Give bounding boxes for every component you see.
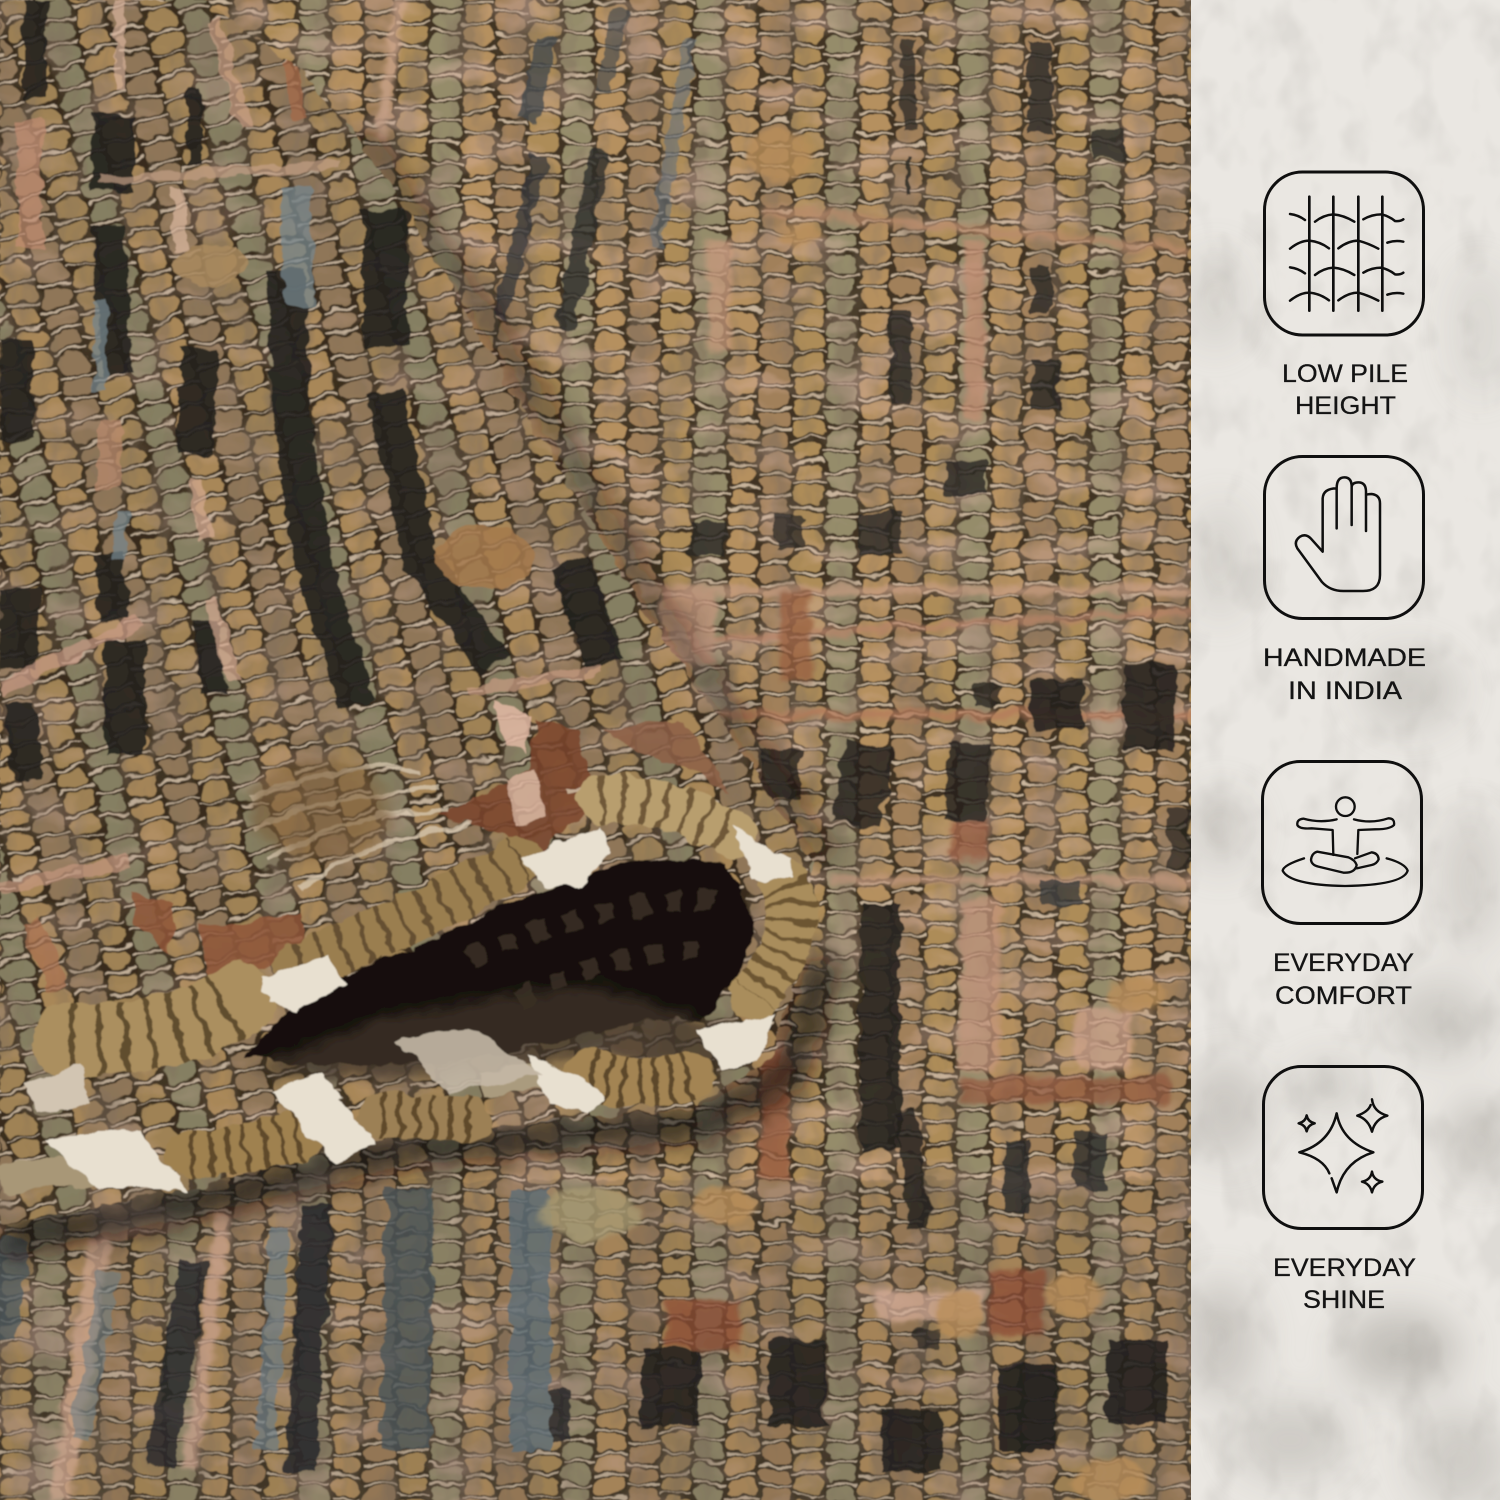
- label: everyday shine: [1273, 1254, 1416, 1314]
- feature: everyday comfort: [1262, 762, 1422, 1010]
- label: everyday shine: EVERYDAY: [1273, 1254, 1416, 1282]
- roll: brown end band: [130, 700, 730, 975]
- rug end: cream cotton tufts: [25, 825, 790, 1190]
- roll: dark stripes: [15, 0, 605, 780]
- label: low pile height: LOW PILE: [1282, 360, 1408, 388]
- roll: slate stripes: [100, 190, 300, 560]
- label: handmade in india: HANDMADE: [1263, 644, 1426, 672]
- label: everyday shine: SHINE: [1303, 1286, 1385, 1314]
- feature: low pile height: [1264, 172, 1424, 420]
- side panel: [1180, 0, 1500, 1500]
- label: low pile height: [1282, 360, 1408, 420]
- flat rug: pink and brown woven blocks: [60, 0, 1200, 1500]
- roll: shaded yarn mound: [435, 526, 535, 590]
- icon: open hand: [1264, 456, 1424, 618]
- feature: everyday shine: [1264, 1066, 1422, 1314]
- roll: pink and brown bands: [0, 0, 600, 990]
- roll hollow: inner back side: [250, 985, 770, 1080]
- label: low pile height: HEIGHT: [1295, 392, 1396, 420]
- panel: frosted background: [1191, 0, 1500, 1500]
- icon: seated meditation figure: [1262, 762, 1422, 924]
- roll hollow: dark opening: [245, 860, 755, 1065]
- label: everyday comfort: COMFORT: [1275, 982, 1412, 1010]
- label: handmade in india: [1263, 644, 1426, 705]
- label: handmade in india: IN INDIA: [1288, 677, 1402, 705]
- label: everyday comfort: [1273, 949, 1414, 1010]
- rope edge: lower curve: [0, 1075, 690, 1180]
- roll: curling stitches at end: [248, 762, 582, 892]
- rolled rug: [0, 0, 830, 1240]
- panel: faint rug texture: [1191, 0, 1500, 1500]
- flat rug: dark and slate woven streaks: [0, 10, 1180, 1470]
- rope edge: upper curve: [70, 799, 791, 1040]
- flat rug: yarn highlights: [540, 129, 1165, 1500]
- icon: woven grid with waves: [1264, 172, 1424, 335]
- icon: sparkles: [1264, 1066, 1422, 1228]
- feature: handmade in india: [1263, 456, 1426, 705]
- panel: blurred rug shadows: [1180, 250, 1500, 1500]
- shadow cast by rolled rug: [0, 130, 830, 1240]
- roll body: [0, 0, 830, 1240]
- label: everyday comfort: EVERYDAY: [1273, 949, 1414, 977]
